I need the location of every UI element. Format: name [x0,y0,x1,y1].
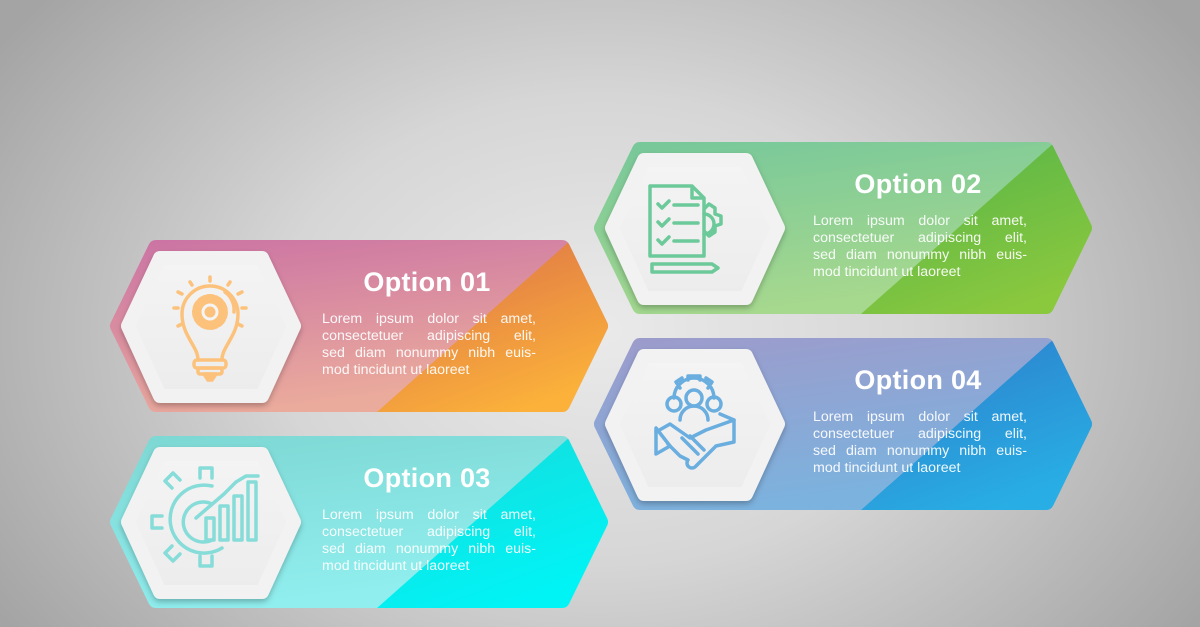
icon: gear with growth chart [152,468,258,566]
text: option 02 [813,169,1027,280]
text: option 04 [813,365,1027,476]
text: option 01: Option 01 [363,267,491,297]
text: option 04: Option 04 [854,365,982,395]
hexagon: icon holder 04 [612,356,778,494]
text: option 02: mod tincidunt ut laoreet [813,264,960,280]
text: option 04: consectetuer adipiscing elit, [813,426,1027,442]
text: option 03: mod tincidunt ut laoreet [322,558,469,574]
icon: light bulb with gear [174,277,246,380]
hexagon: icon holder 01 [128,258,294,396]
hexagon: icon holder 02 [612,160,778,298]
text: option 03: consectetuer adipiscing elit, [322,524,536,540]
text: option 02: sed diam nonummy nibh euis- [813,247,1027,263]
banner: option 01 [118,232,620,420]
text: option 03: Option 03 [363,463,491,493]
text: option 04: Lorem ipsum dolor sit amet, [813,409,1027,425]
text: option 03: sed diam nonummy nibh euis- [322,541,536,557]
text: option 04: sed diam nonummy nibh euis- [813,443,1027,459]
icon: checklist document with gear [650,186,721,272]
text: option 01: consectetuer adipiscing elit, [322,328,536,344]
text: option 02: Option 02 [854,169,982,199]
text: option 02: Lorem ipsum dolor sit amet, [813,213,1027,229]
text: option 04: mod tincidunt ut laoreet [813,460,960,476]
banner: option 04 [602,330,1104,518]
hexagon: icon holder 03 [128,454,294,592]
text: option 01: mod tincidunt ut laoreet [322,362,469,378]
banner: option 03 [118,428,620,616]
banner: option 02 [602,134,1104,322]
text: option 01: sed diam nonummy nibh euis- [322,345,536,361]
text: option 03: Lorem ipsum dolor sit amet, [322,507,536,523]
text: option 01 [322,267,536,378]
text: option 01: Lorem ipsum dolor sit amet, [322,311,536,327]
text: option 02: consectetuer adipiscing elit, [813,230,1027,246]
icon: team handshake with gear [656,376,734,468]
text: option 03 [322,463,536,574]
